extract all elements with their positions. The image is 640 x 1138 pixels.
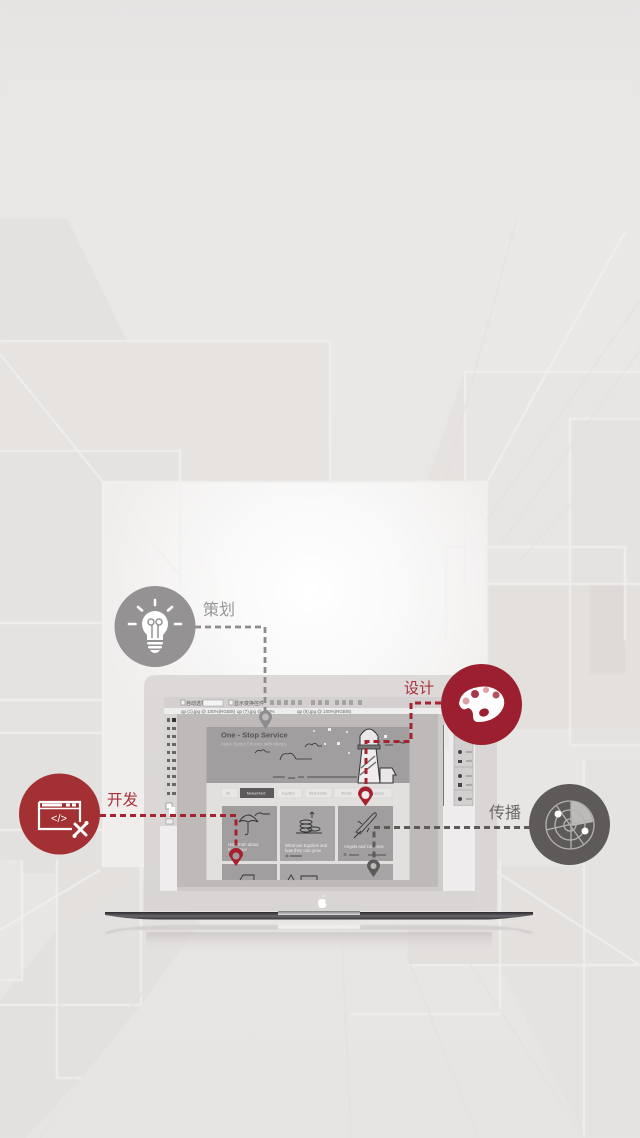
- screen: [160, 697, 497, 911]
- pin: promotion: [367, 860, 380, 877]
- cards: What are Equities and: [285, 843, 328, 848]
- cards: Angels and Unicorns: [344, 844, 384, 849]
- laptop base: [105, 911, 533, 920]
- pin: design: [358, 786, 373, 806]
- label: development: 开发: [107, 791, 138, 809]
- node: design: [404, 664, 522, 745]
- banner: [206, 727, 410, 783]
- icon: light bulb: [114, 586, 196, 667]
- tabs: Real Estate: [309, 792, 327, 796]
- cards: how they can grow: [285, 848, 322, 853]
- cards: Insurance: [228, 847, 247, 852]
- node: promotion: [489, 784, 610, 865]
- icon: radar: [529, 784, 610, 865]
- icon: palette: [441, 664, 522, 745]
- tabs: Stocks: [341, 792, 352, 796]
- laptop reflection: [105, 925, 533, 954]
- web page mockup: [206, 727, 410, 880]
- connector: planning: [195, 627, 265, 712]
- cards: Half Truth about: [228, 842, 259, 847]
- connector: design: [366, 703, 441, 785]
- laptop: [105, 675, 533, 954]
- banner: One - Stop Service: [221, 730, 288, 740]
- pin: development: [229, 848, 243, 866]
- tabs: Equities: [282, 792, 295, 796]
- cards: [222, 806, 393, 880]
- label: promotion: 传播: [489, 804, 521, 822]
- lighthouse: [358, 729, 396, 783]
- tool panel: [160, 714, 177, 891]
- tabs: Insurance: [369, 792, 384, 796]
- label: planning: 策划: [203, 601, 235, 619]
- toolbar: qp (1).jpg @ 100%(RGB/8): [181, 709, 236, 714]
- connector: promotion: [374, 828, 530, 860]
- toolbar: qp (8).jpg @ 100%(RGB/8): [297, 709, 352, 714]
- toolbar: 显示变换控件: [234, 700, 264, 707]
- connector: development: [100, 816, 236, 849]
- tabs: All: [226, 792, 230, 796]
- toolbar: qp (7).jpg @ 100%: [237, 709, 275, 714]
- toolbar: [164, 697, 475, 714]
- icon: code window with tools: </>: [51, 813, 67, 825]
- pin: planning: [259, 710, 272, 729]
- node: planning: [114, 586, 235, 667]
- banner: Make Better Choices with Money: [221, 742, 288, 746]
- label: design: 设计: [404, 680, 434, 697]
- right panel: [443, 697, 497, 911]
- apple logo: [318, 895, 326, 908]
- tabs: Mutual fund: [247, 792, 265, 796]
- toolbar: 自动选择: [186, 700, 206, 707]
- tabs: [221, 788, 392, 798]
- laptop body: [144, 675, 497, 911]
- node: development: [19, 774, 138, 854]
